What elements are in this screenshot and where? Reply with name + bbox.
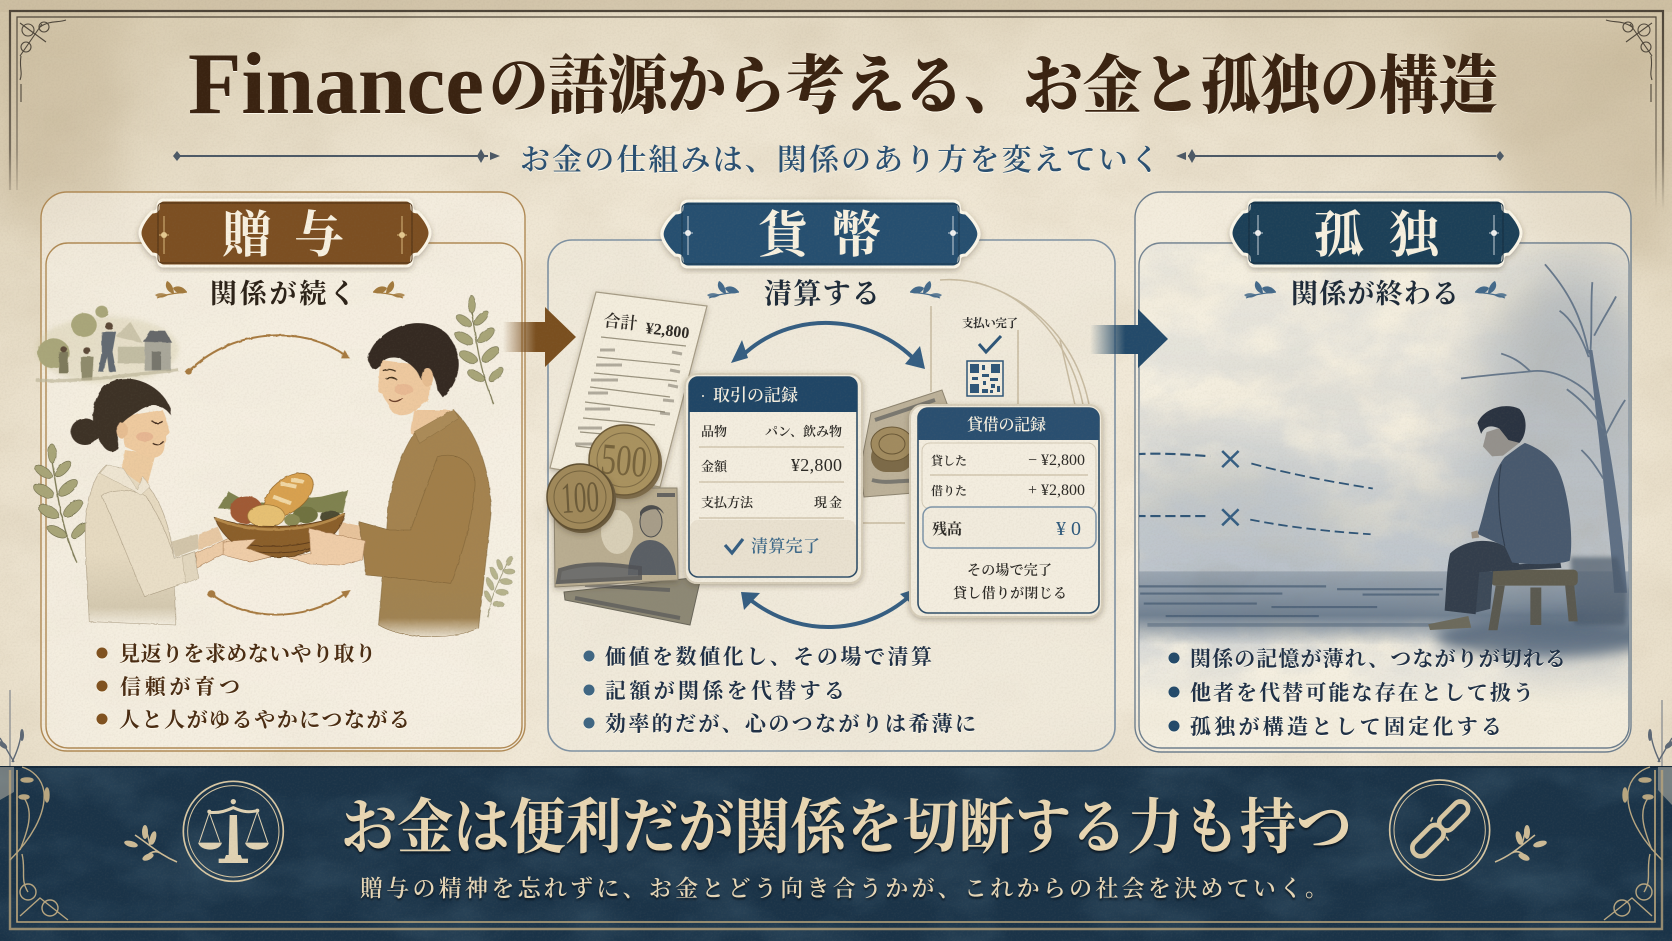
subheading: currency: 清算する [764, 272, 880, 312]
banner sub message: 贈与の精神を忘れずに、お金とどう向き合うかが、これからの社会を決めていく。 [360, 870, 1328, 903]
banknotes [554, 488, 701, 625]
panel frame: loneliness [1135, 192, 1631, 752]
panel: currency [547, 195, 1115, 751]
receipt: 合計 [602, 306, 639, 335]
card: lending record: 貸借の記録 [967, 412, 1046, 435]
banner main message: お金は便利だが関係を切断する力も持つ [341, 780, 1352, 866]
bullet list: currency: 効率的だが、心のつながりは希薄に [605, 708, 976, 738]
badge: loneliness: 孤独 [1314, 195, 1444, 267]
decorative page frame [10, 11, 1663, 770]
card: transaction record: 金額 [701, 456, 728, 475]
seated man [1428, 406, 1627, 630]
card: transaction record: 現金 [814, 492, 842, 511]
bullet list: gift: 信頼が育つ [120, 671, 240, 701]
man [339, 323, 491, 637]
bullet list: loneliness: 孤独が構造として固定化する [1190, 711, 1502, 741]
bullet list: loneliness: 他者を代替可能な存在として扱う [1190, 677, 1534, 707]
badge: gift [140, 195, 430, 267]
bullet list: currency: 記額が関係を代替する [605, 675, 845, 705]
card: lending record: その場で完了 [967, 560, 1052, 580]
banner ground [0, 767, 1672, 941]
panel: gift [30, 192, 528, 751]
faint background sketch [860, 280, 1090, 523]
card: transaction record: 品物 [701, 421, 727, 440]
severed connection lines [1135, 451, 1373, 534]
illustration: solitary figure in fog [1139, 243, 1629, 696]
card: lending record: ¥ 0 [1056, 518, 1081, 540]
subtitle with side rules [173, 135, 1504, 179]
title: Finance [188, 36, 484, 133]
card: transaction record: 支払方法 [701, 492, 754, 511]
plants [30, 293, 528, 622]
badge: gift: 贈与 [222, 195, 344, 267]
subheading: loneliness [1244, 272, 1507, 311]
arrow: gift to currency [503, 307, 576, 367]
bullet list: loneliness [1168, 643, 1566, 741]
icon: broken chain [1390, 780, 1490, 880]
circular arrows bottom [741, 587, 921, 627]
circular arrows top [731, 323, 925, 369]
title [188, 35, 1498, 133]
ground [1136, 571, 1654, 657]
receipt [550, 292, 707, 487]
badge: loneliness [1231, 195, 1521, 267]
exchange arrows [185, 335, 351, 615]
subheading: currency [707, 272, 942, 312]
receipt: ¥2,800 [645, 320, 690, 342]
subheading: gift [155, 272, 405, 311]
card: lending record: 貸し借りが閉じる [953, 583, 1067, 603]
coins: 500 [599, 434, 649, 487]
bare tree [1461, 264, 1627, 593]
illustration: two people exchanging a basket [30, 293, 528, 637]
bullet list: loneliness: 関係の記憶が薄れ、つながりが切れる [1190, 643, 1566, 673]
fog noise [1139, 242, 1629, 702]
badge: currency: 貨幣 [758, 195, 881, 267]
small branches [123, 825, 1548, 862]
fog haze [1100, 260, 1670, 660]
card: lending record: 借りた [931, 482, 967, 499]
panel frame: currency [548, 240, 1115, 751]
bullet list: currency: 価値を数値化し、その場で清算 [605, 641, 932, 671]
card: lending record: 貸した [931, 452, 967, 469]
icon: balance scale [183, 781, 283, 881]
bullet list: currency [584, 641, 976, 738]
card: lending record [910, 405, 1102, 617]
card: lending record: + ¥2,800 [1028, 482, 1085, 499]
card: lending record: − ¥2,800 [1028, 452, 1085, 469]
card: lending record: 残高 [932, 518, 962, 539]
card: transaction record: 清算完了 [751, 532, 820, 557]
coins: 100 [560, 472, 600, 523]
basket with food [214, 465, 348, 557]
payment complete QR block [962, 315, 1018, 396]
bullet list: gift: 見返りを求めないやり取り [119, 638, 376, 668]
subtitle with side rules: お金の仕組みは、関係のあり方を変えていく [520, 135, 1160, 179]
card: transaction record: 取引の記録 [713, 381, 798, 406]
woman [71, 379, 272, 625]
panel frame: gift [41, 192, 525, 751]
bullet list: gift [96, 638, 410, 734]
panel: loneliness [1134, 191, 1632, 753]
subheading: gift: 関係が続く [210, 272, 356, 311]
village vignette [36, 306, 179, 383]
card: transaction record: ¥2,800 [791, 455, 842, 475]
payment complete QR block: 支払い完了 [962, 315, 1018, 331]
bullet list: gift: 人と人がゆるやかにつながる [119, 704, 410, 734]
arrow: currency to loneliness [1090, 309, 1168, 368]
coins [547, 425, 662, 533]
badge: currency [662, 195, 979, 267]
card: transaction record [685, 374, 862, 583]
second banknote and coin stack [860, 390, 950, 497]
title: の語源から考える、お金と孤独の構造 [489, 35, 1498, 127]
hands [223, 528, 365, 565]
card: transaction record: パン、飲み物 [765, 421, 842, 440]
subheading: loneliness: 関係が終わる [1291, 272, 1459, 311]
banner corner flourishes [0, 729, 1672, 920]
bottom banner [0, 729, 1672, 941]
